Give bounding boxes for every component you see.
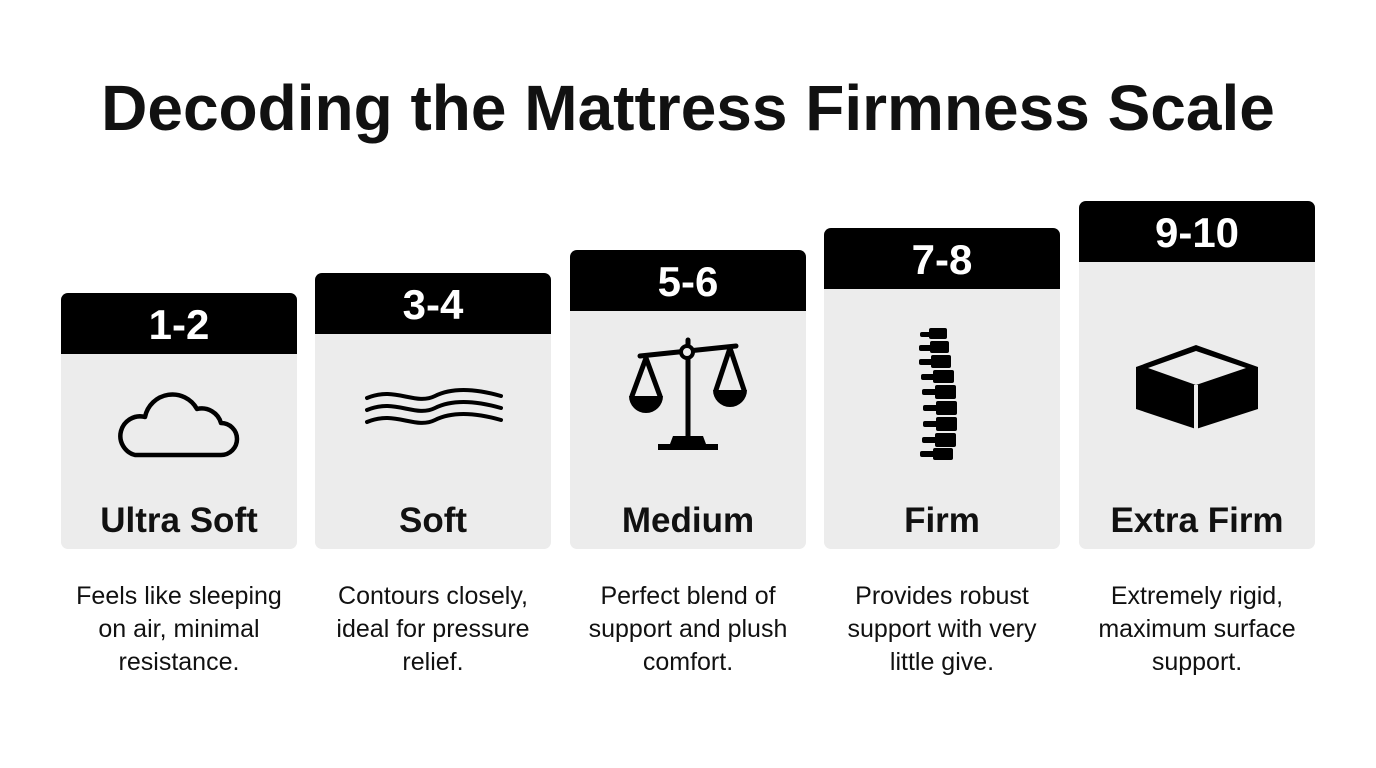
header 1-2 bbox=[61, 293, 297, 354]
description: medium: support and plush bbox=[589, 615, 787, 643]
label: Medium bbox=[622, 501, 754, 540]
description: firm: Provides robust bbox=[855, 582, 1029, 610]
label: Extra Firm bbox=[1110, 501, 1284, 540]
panel: ultra soft bbox=[61, 293, 297, 549]
header 7-8: 7-8 bbox=[912, 236, 972, 283]
description: soft bbox=[336, 582, 530, 676]
description: medium: comfort. bbox=[643, 648, 733, 676]
panel: medium bbox=[570, 250, 806, 549]
icon: spine bbox=[919, 328, 957, 460]
description: medium bbox=[589, 582, 787, 676]
header 3-4 bbox=[315, 273, 551, 334]
description: firm bbox=[848, 582, 1036, 676]
icon: scale bbox=[629, 338, 747, 450]
title: Decoding the Mattress Firmness Scale bbox=[101, 72, 1275, 144]
description: soft: relief. bbox=[402, 648, 464, 676]
description: extra firm: maximum surface bbox=[1098, 615, 1296, 643]
description: ultra soft bbox=[76, 582, 282, 676]
description: firm: support with very bbox=[848, 615, 1036, 643]
label: Soft bbox=[399, 501, 467, 540]
description: medium: Perfect blend of bbox=[600, 582, 776, 610]
panel: soft bbox=[315, 273, 551, 549]
panel: extra firm bbox=[1079, 201, 1315, 549]
header 5-6: 5-6 bbox=[658, 258, 718, 305]
description: extra firm bbox=[1098, 582, 1296, 676]
description: soft: ideal for pressure bbox=[336, 615, 530, 643]
description: ultra soft: Feels like sleeping bbox=[76, 582, 282, 610]
description: firm: little give. bbox=[890, 648, 994, 676]
header 9-10 bbox=[1079, 201, 1315, 262]
header 9-10: 9-10 bbox=[1155, 209, 1239, 256]
description: ultra soft: on air, minimal bbox=[98, 615, 260, 643]
icon: box bbox=[1136, 345, 1258, 428]
header 3-4: 3-4 bbox=[403, 281, 463, 328]
description: ultra soft: resistance. bbox=[119, 648, 239, 676]
description: soft: Contours closely, bbox=[338, 582, 528, 610]
header 1-2: 1-2 bbox=[149, 301, 209, 348]
label: Firm bbox=[904, 501, 980, 540]
description: extra firm: Extremely rigid, bbox=[1111, 582, 1283, 610]
label: Ultra Soft bbox=[100, 501, 258, 540]
icon: waves bbox=[365, 388, 504, 425]
description: extra firm: support. bbox=[1152, 648, 1242, 676]
icon: cloud bbox=[118, 392, 240, 458]
header 7-8 bbox=[824, 228, 1060, 289]
panel: firm bbox=[824, 228, 1060, 549]
header 5-6 bbox=[570, 250, 806, 311]
